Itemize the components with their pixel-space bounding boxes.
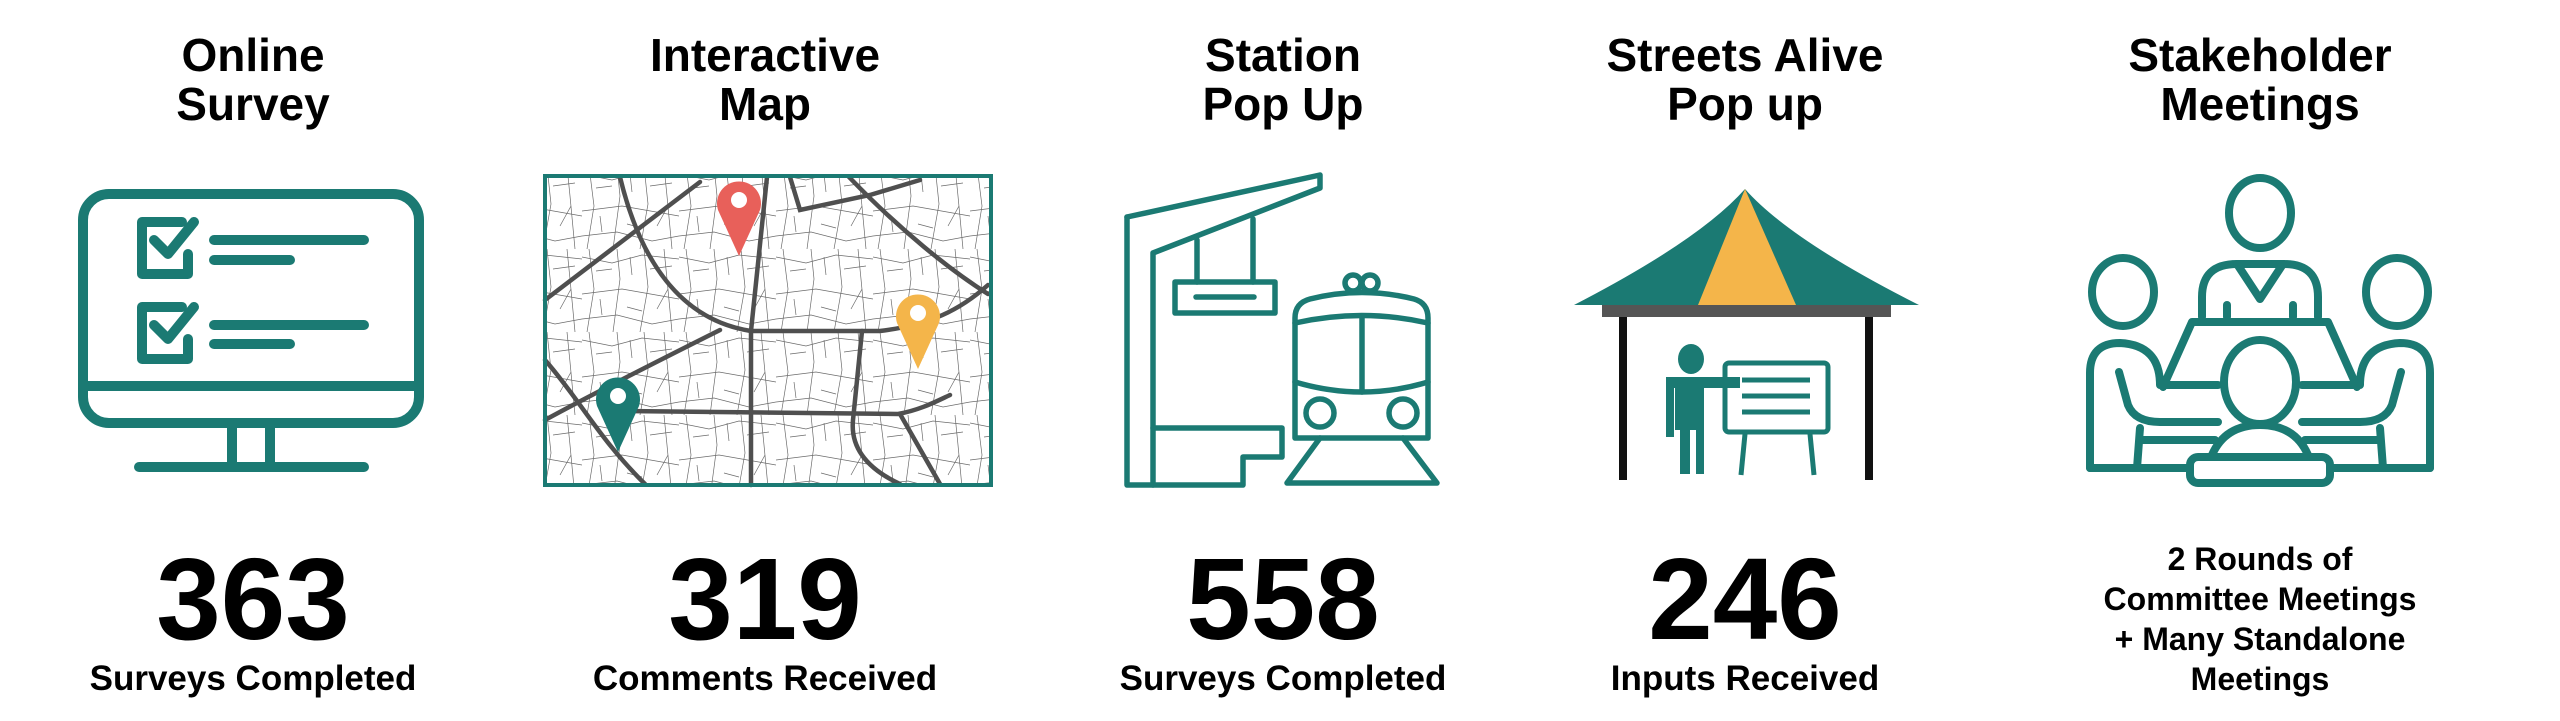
title: interactive map (650, 29, 880, 130)
stat: station pop up: 558 (1186, 534, 1380, 664)
stat: interactive map: Comments Received (593, 659, 937, 698)
stat: stakeholder meetings text (2104, 541, 2416, 697)
title: station pop up: Station (1205, 29, 1361, 81)
title: streets alive pop up: Pop up (1667, 78, 1823, 130)
title: online survey: Survey (176, 78, 330, 130)
stat: streets alive: Inputs Received (1611, 659, 1879, 698)
stat: stakeholder meetings text: + Many Standalone (2115, 621, 2405, 657)
title: streets alive pop up: Streets Alive (1606, 29, 1884, 81)
icon: yellow pin (896, 294, 940, 369)
stat: online survey (90, 534, 416, 698)
title: stakeholder meetings: Meetings (2160, 78, 2360, 130)
icon: teal pin (596, 377, 640, 452)
title: station pop up: Pop Up (1202, 78, 1363, 130)
stat: online survey: 363 (156, 534, 350, 664)
title: interactive map: Map (719, 78, 811, 130)
title: online survey (176, 29, 330, 130)
title: station pop up (1202, 29, 1363, 130)
stat: online survey: Surveys Completed (90, 659, 416, 698)
stat: streets alive: 246 (1648, 534, 1842, 664)
stat: stakeholder meetings text: Meetings (2191, 661, 2329, 697)
stat: station pop up (1120, 534, 1446, 698)
title: stakeholder meetings (2128, 29, 2392, 130)
icon: station shelter and train (1127, 175, 1437, 485)
icon: street map with pins (545, 176, 991, 485)
icon: monitor with checklist (83, 194, 419, 467)
stat: streets alive (1611, 534, 1879, 698)
title: online survey: Online (181, 29, 325, 81)
title: interactive map: Interactive (650, 29, 880, 81)
stat: interactive map (593, 534, 937, 698)
stat: station pop up: Surveys Completed (1120, 659, 1446, 698)
icon: red pin (717, 181, 761, 256)
icon: meeting table with people (2090, 178, 2430, 483)
stat: interactive map: 319 (668, 534, 862, 664)
icon: pop-up tent with presenter (1574, 189, 1919, 480)
title: streets alive pop up (1606, 29, 1884, 130)
title: stakeholder meetings: Stakeholder (2128, 29, 2392, 81)
stat: stakeholder meetings text: 2 Rounds of (2168, 541, 2352, 577)
stat: stakeholder meetings text: Committee Meetings (2104, 581, 2416, 617)
